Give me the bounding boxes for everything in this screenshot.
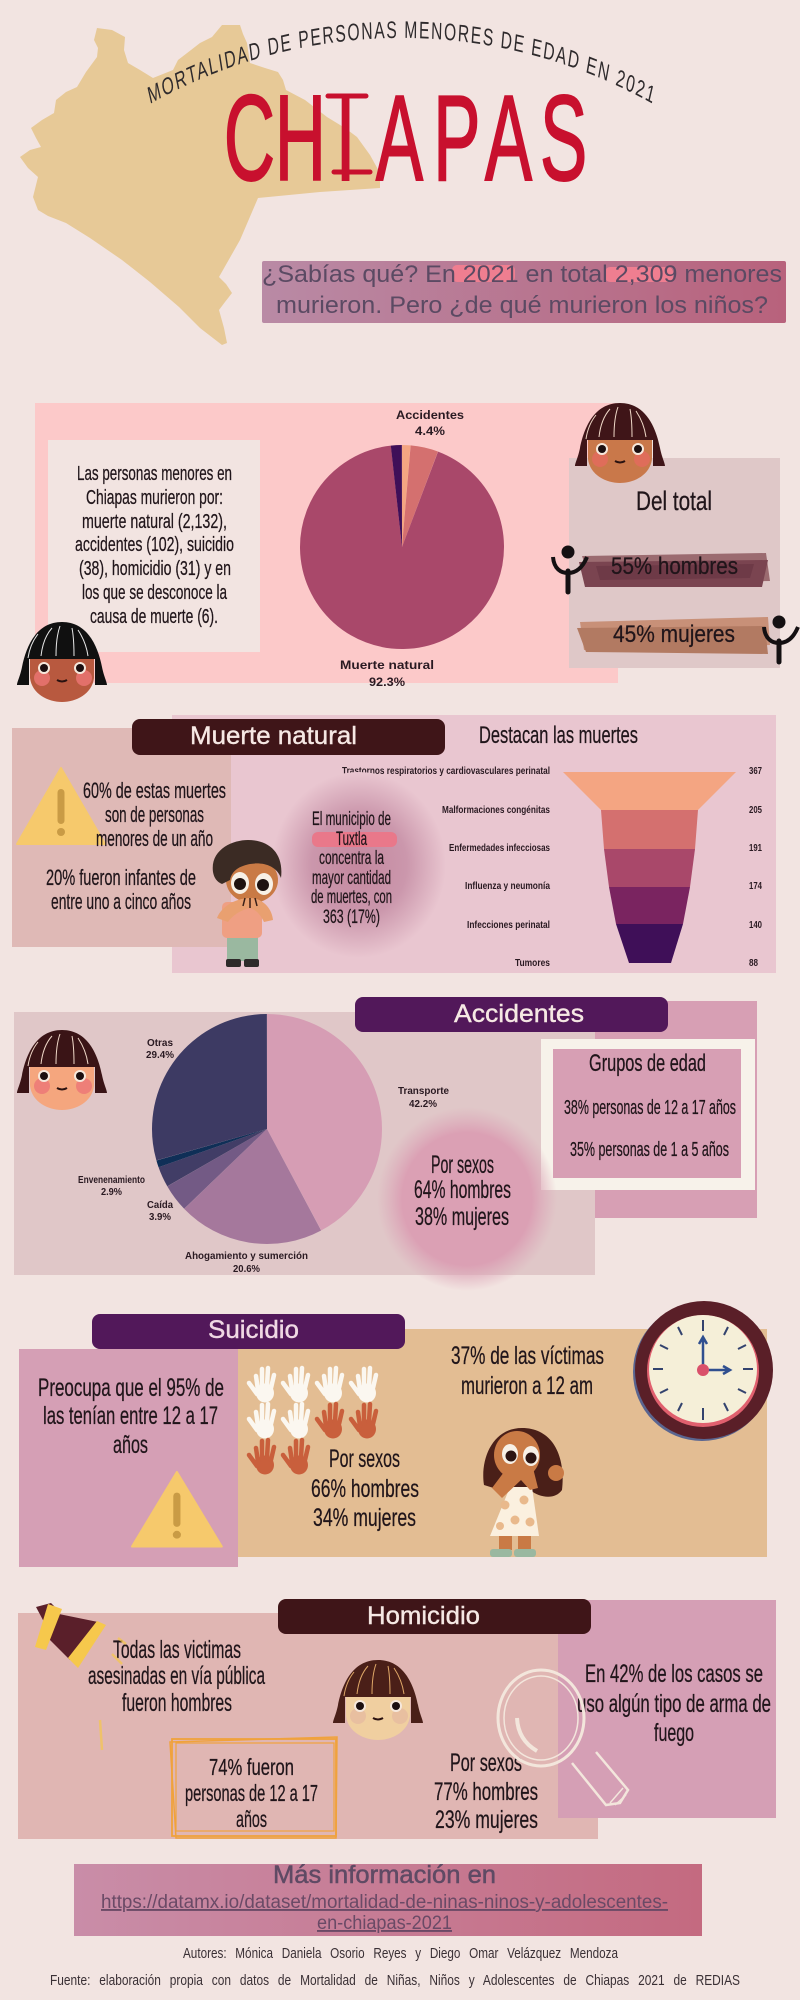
funnel labels: Enfermedades infecciosas — [449, 843, 550, 854]
pie label: muerte natural: Muerte natural — [340, 660, 434, 672]
box: 74 percent — [170, 1737, 337, 1838]
pie label: muerte natural — [340, 660, 434, 689]
stat: infantes: 20% fueron infantes de — [46, 865, 196, 890]
stat: via publica: asesinadas en vía pública — [88, 1662, 265, 1690]
title bar: muerte natural — [132, 719, 445, 755]
text: preocupa — [38, 1374, 224, 1459]
pie labels: 42.2% — [409, 1098, 438, 1110]
heading: del total: Del total — [636, 486, 712, 516]
pie labels: Ahogamiento y sumerción — [185, 1250, 308, 1262]
title bar: homicidio: Homicidio — [367, 1602, 480, 1630]
text: preocupa: las tenían entre 12 a 17 — [43, 1402, 218, 1430]
text block: causes — [48, 440, 260, 652]
text: arma de fuego: fuego — [654, 1719, 694, 1747]
pie label: muerte natural: 92.3% — [369, 677, 405, 689]
stat: por sexos suicidio: Por sexos — [329, 1445, 400, 1473]
stat: por sexos homicidio: Por sexos — [450, 1749, 522, 1777]
callout: mas informacion: Más información en — [273, 1861, 496, 1889]
stat: infantes — [46, 865, 196, 914]
funnel labels — [342, 766, 550, 969]
callout: question: ¿Sabías qué? En 2021 en total 2,309 menores — [262, 261, 782, 288]
pie chart: accidents — [186, 1048, 348, 1210]
pie labels: 3.9% — [149, 1211, 172, 1223]
stat: hombres: 55% hombres — [611, 553, 738, 580]
icon: face homicidio — [333, 1660, 423, 1740]
stat: hombres — [579, 553, 770, 587]
pie labels: Caída — [147, 1199, 173, 1211]
icon: warning — [17, 768, 105, 844]
stat: via publica: fueron hombres — [122, 1689, 232, 1717]
callout: por sexos accidentes: Por sexos — [431, 1151, 494, 1179]
callout: municipio Tuxtla — [272, 772, 446, 958]
icon: megaphone — [35, 1603, 126, 1750]
icon: hands pictogram — [249, 1368, 376, 1474]
stat: por sexos homicidio: 77% hombres — [434, 1778, 538, 1806]
pie labels — [78, 1037, 449, 1275]
callout: municipio Tuxtla: El municipio de — [312, 809, 391, 830]
panel: suicidio — [200, 1301, 773, 1557]
panel: accidentes — [14, 1012, 595, 1275]
title: subtitle arc: MORTALIDAD DE PERSONAS MENORES DE EDAD EN 2021 — [148, 21, 653, 104]
text: autores: Autores: Mónica Daniela Osorio Reyes y Diego Omar Velázquez Mendoza — [183, 1945, 619, 1962]
stat: via publica — [88, 1636, 265, 1717]
stat: 12 am: murieron a 12 am — [461, 1372, 593, 1400]
funnel values: 88 — [749, 958, 758, 969]
pie labels: 29.4% — [146, 1049, 175, 1061]
icon: face bottom left — [17, 622, 107, 702]
text block: causes: Las personas menores en — [77, 463, 232, 485]
text block: causes: accidentes (102), suicidio — [75, 534, 234, 556]
text block: causes: causa de muerte (6). — [90, 606, 218, 628]
title bar: homicidio — [278, 1599, 591, 1634]
stat: 12 am — [451, 1342, 604, 1400]
callout: municipio Tuxtla: mayor cantidad — [312, 868, 391, 889]
panel: preocupa — [19, 1349, 238, 1567]
panel: del total — [569, 458, 780, 668]
funnel values — [749, 766, 762, 969]
panel: arma de fuego — [558, 1600, 776, 1818]
callout: mas informacion — [74, 1861, 702, 1936]
box: 74 percent: 74% fueron — [209, 1754, 294, 1780]
callout: municipio Tuxtla: de muertes, con — [311, 887, 392, 908]
pie labels: 20.6% — [233, 1263, 261, 1275]
stat: menores de un año: menores de un año — [96, 826, 213, 851]
panel: homicidio main — [18, 1613, 598, 1839]
text: arma de fuego — [577, 1660, 771, 1747]
stat: via publica: Todas las victimas — [113, 1636, 241, 1664]
text: preocupa: Preocupa que el 95% de — [38, 1374, 224, 1402]
stat: infantes: entre uno a cinco años — [51, 889, 191, 914]
map of Chiapas — [20, 25, 380, 345]
stat: menores de un año — [83, 778, 226, 851]
panel: muerte natural left — [12, 728, 231, 947]
title bar: accidentes — [355, 997, 668, 1032]
pie labels: Envenenamiento — [78, 1174, 145, 1186]
title bar: accidentes: Accidentes — [454, 1000, 584, 1028]
panel: muerte natural right — [172, 715, 776, 973]
pie labels: Transporte — [398, 1085, 449, 1097]
icon: face top right — [575, 403, 665, 483]
funnel labels: Influenza y neumonía — [465, 881, 550, 892]
funnel values: 205 — [749, 805, 762, 816]
icon: face accidentes — [17, 1030, 107, 1110]
callout: por sexos accidentes — [377, 1107, 557, 1291]
callout: mas informacion: https://datamx.io/dataset/mortalidad-de-ninas-ninos-y-adolescentes- — [101, 1892, 668, 1913]
text block: causes: (38), homicidio (31) y en — [79, 558, 231, 580]
text: preocupa: años — [113, 1431, 148, 1459]
title bar: muerte natural: Muerte natural — [190, 722, 357, 750]
box: grupos de edad: Grupos de edad — [589, 1050, 706, 1077]
stat: 12 am: 37% de las víctimas — [451, 1342, 604, 1370]
stat: mujeres — [577, 617, 770, 654]
funnel chart — [563, 772, 736, 963]
callout: mas informacion: en-chiapas-2021 — [317, 1913, 452, 1934]
icon: person male — [553, 546, 587, 592]
icon: magnifier — [498, 1670, 628, 1805]
pie label: accidentes: 4.4% — [415, 426, 445, 438]
stat: menores de un año: 60% de estas muertes — [83, 778, 226, 803]
funnel values: 367 — [749, 766, 762, 777]
funnel labels: Infecciones perinatal — [467, 920, 550, 931]
funnel values: 191 — [749, 843, 762, 854]
panel: causes overview — [35, 403, 618, 689]
icon: girl — [483, 1428, 564, 1557]
funnel values: 174 — [749, 881, 762, 892]
pie label: accidentes — [396, 410, 464, 438]
callout: por sexos accidentes: 64% hombres — [414, 1176, 511, 1204]
pie chart: causes of death — [336, 481, 468, 613]
funnel values: 140 — [749, 920, 762, 931]
icon: clock — [633, 1301, 773, 1441]
panel: grupos de edad — [538, 1001, 757, 1218]
funnel labels: Trastornos respiratorios y cardiovasculares perinatal — [342, 766, 550, 777]
text block: causes: Chiapas murieron por: — [86, 487, 223, 509]
text block: causes: muerte natural (2,132), — [82, 511, 227, 533]
stat: menores de un año: son de personas — [105, 802, 204, 827]
callout: question: murieron. Pero ¿de qué murieron los niños? — [276, 292, 768, 319]
funnel labels: Tumores — [515, 958, 550, 969]
stat: por sexos suicidio — [311, 1445, 419, 1532]
callout: municipio Tuxtla: 363 (17%) — [323, 907, 380, 928]
icon: person female — [764, 616, 798, 662]
box: 74 percent: años — [236, 1806, 267, 1832]
title bar: suicidio — [92, 1314, 405, 1349]
pie labels: Otras — [147, 1037, 173, 1049]
callout: municipio Tuxtla: Tuxtla — [336, 829, 367, 850]
callout: municipio Tuxtla: concentra la — [319, 848, 384, 869]
stat: por sexos suicidio: 66% hombres — [311, 1475, 419, 1503]
pie labels: 2.9% — [101, 1186, 123, 1198]
callout: question — [262, 261, 786, 323]
stat: por sexos homicidio: 23% mujeres — [435, 1806, 538, 1834]
pie label: accidentes: Accidentes — [396, 410, 464, 422]
stat: mujeres: 45% mujeres — [613, 621, 735, 648]
title: CHIAPAS: CHIAPAS — [224, 71, 587, 207]
stat: por sexos suicidio: 34% mujeres — [313, 1504, 416, 1532]
heading: destacan: Destacan las muertes — [479, 722, 638, 749]
box: grupos de edad — [541, 1039, 755, 1190]
title bar: suicidio: Suicidio — [208, 1316, 299, 1344]
callout: por sexos accidentes: 38% mujeres — [415, 1203, 509, 1231]
icon: warning — [132, 1472, 222, 1546]
icon: boy — [213, 840, 281, 967]
stat: por sexos homicidio — [434, 1749, 538, 1834]
box: 74 percent: personas de 12 a 17 — [185, 1780, 318, 1806]
text block: causes: los que se desconoce la — [82, 582, 228, 604]
funnel labels: Malformaciones congénitas — [442, 805, 550, 816]
